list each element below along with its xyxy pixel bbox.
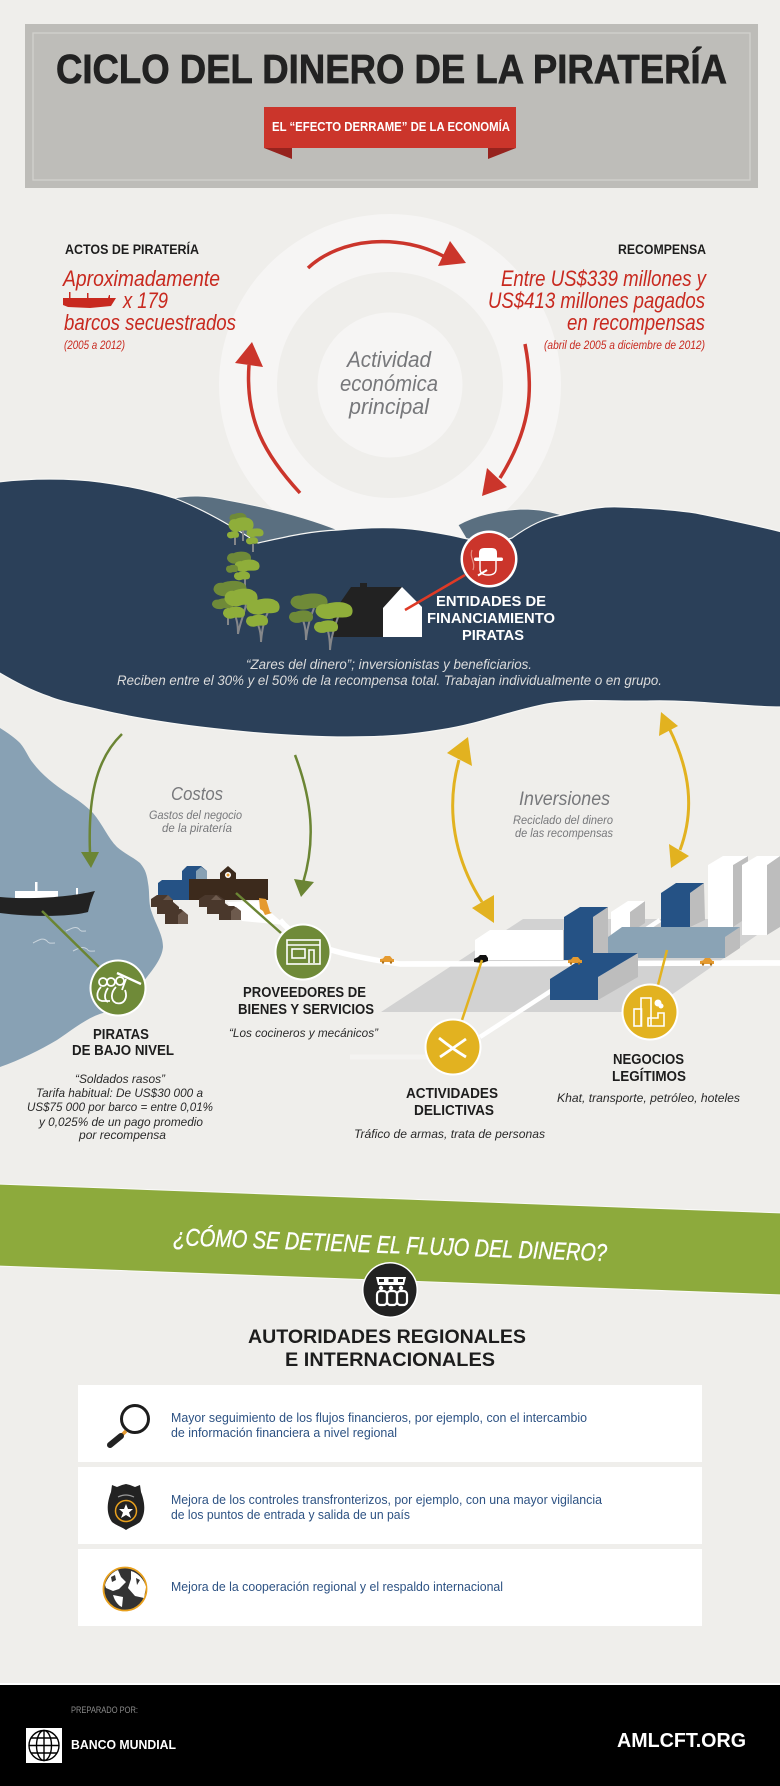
icon: globe [104, 1568, 146, 1610]
text: suppliers quote: “Los cocineros y mecánicos” [229, 1026, 379, 1040]
label: costs: de la piratería [162, 823, 232, 835]
text: financiers description: Reciben entre el 30% y el 50% de la recompensa total. Trabajan individualmente o en grupo. [117, 673, 662, 688]
text: low level pirates description: por recompensa [78, 1128, 166, 1142]
text: Banco Mundial: BANCO MUNDIAL [71, 1737, 176, 1752]
water [0, 728, 163, 1067]
connector: legit business line [658, 950, 667, 985]
banner: green stripe [0, 1184, 780, 1295]
logo: World Bank [26, 1728, 62, 1763]
icon: financier hat [460, 530, 518, 588]
text: low level pirates description: Tarifa habitual: De US$30 000 a [36, 1086, 203, 1100]
block: acts of piracy: ACTOS DE PIRATERÍA [65, 242, 199, 257]
block: acts of piracy: barcos secuestrados [64, 310, 236, 335]
heading: financiers [427, 594, 555, 644]
center label: Actividad [345, 347, 432, 372]
icon: house [333, 583, 422, 637]
label: investments: Inversiones [519, 789, 610, 810]
block: acts of piracy: Aproximadamente [61, 266, 220, 291]
back hills [174, 496, 562, 560]
center label: económica [340, 371, 438, 396]
footer [0, 1683, 780, 1786]
road over ground [400, 920, 780, 1037]
block: ransom: RECOMPENSA [618, 242, 706, 257]
heading: suppliers [238, 985, 374, 1018]
heading: low level pirates: DE BAJO NIVEL [72, 1043, 174, 1059]
arrow: green costs right [294, 755, 314, 897]
trees: house cluster [289, 593, 353, 650]
arrow: right red [482, 344, 529, 496]
heading: low level pirates [72, 1027, 174, 1059]
connector: suppliers line [236, 893, 281, 933]
arrow: yellow investment right [659, 712, 689, 868]
trees: top cluster [227, 513, 264, 552]
heading: financiers: FINANCIAMIENTO [427, 611, 555, 627]
text: cooperation: Mejora de la cooperación regional y el respaldo internacional [171, 1580, 503, 1594]
block: ransom: en recompensas [567, 310, 705, 335]
heading: legitimate business [612, 1052, 686, 1085]
icon: buildings [622, 984, 678, 1040]
heading: legitimate business: LEGÍTIMOS [612, 1068, 686, 1085]
concentric circles: main economic activity [219, 214, 561, 556]
text: website: AMLCFT.ORG [617, 1730, 746, 1752]
waves [33, 928, 95, 951]
heading: legitimate business: NEGOCIOS [613, 1052, 684, 1068]
panel: cooperation [78, 1549, 702, 1626]
trees: lower cluster [212, 581, 280, 642]
label: investments [513, 789, 614, 840]
arrow: left red [235, 342, 300, 493]
center label [340, 347, 438, 419]
label: investments: de las recompensas [515, 828, 613, 840]
icon: authorities [362, 1262, 418, 1318]
panel: title header [25, 24, 758, 188]
block: ransom: US$413 millones pagados [488, 288, 705, 313]
text: controls [171, 1493, 602, 1522]
text: legitimate business examples: Khat, transporte, petróleo, hoteles [557, 1091, 740, 1105]
port buildings [151, 866, 272, 924]
heading: criminal activities: ACTIVIDADES [406, 1086, 498, 1102]
icon: low level pirates [90, 960, 146, 1016]
city buildings [475, 856, 780, 1000]
icon: large ship [0, 882, 95, 916]
icon: suppliers store [274, 924, 332, 980]
block: acts of piracy: x 179 [122, 288, 168, 313]
text: tracking: de información financiera a nivel regional [171, 1426, 397, 1440]
text: low level pirates description: y 0,025% de un pago promedio [38, 1115, 203, 1129]
arrow: yellow investment left [447, 737, 494, 923]
heading: authorities: E INTERNACIONALES [285, 1350, 495, 1371]
panel: border controls [78, 1467, 702, 1544]
ribbon subtitle [264, 107, 516, 159]
block: acts of piracy [61, 242, 236, 352]
heading: low level pirates: PIRATAS [93, 1027, 149, 1043]
ribbon subtitle: EL “EFECTO DERRAME” DE LA ECONOMÍA [272, 119, 510, 134]
road [227, 901, 780, 1057]
label: costs: Gastos del negocio [149, 810, 243, 822]
cars [380, 955, 714, 966]
icon: magnifier [110, 1406, 148, 1445]
text: low level pirates description [27, 1072, 213, 1142]
block: acts of piracy: (2005 a 2012) [64, 340, 125, 352]
trees: middle cluster [226, 552, 260, 590]
block: ransom: (abril de 2005 a diciembre de 2012) [544, 340, 705, 352]
heading: financiers: ENTIDADES DE [436, 594, 546, 610]
heading: suppliers: PROVEEDORES DE [243, 985, 366, 1001]
heading: criminal activities: DELICTIVAS [414, 1103, 494, 1119]
heading: suppliers: BIENES Y SERVICIOS [238, 1002, 374, 1018]
connector: financiers line [405, 575, 465, 610]
text: low level pirates description: “Soldados rasos” [75, 1072, 166, 1086]
label: costs [149, 784, 243, 835]
text: controls: Mejora de los controles transfronterizos, por ejemplo, con una mayor vigilancia [171, 1493, 602, 1507]
icon: crossed rifles [424, 1018, 482, 1076]
heading: criminal activities [406, 1086, 498, 1119]
block: ransom [488, 242, 708, 352]
panel: financiers blue landscape [0, 479, 780, 737]
heading: how to stop: ¿CÓMO SE DETIENE EL FLUJO DEL DINERO? [173, 1224, 608, 1267]
connector: criminal activities line [462, 960, 482, 1020]
panel: financial tracking [78, 1385, 702, 1462]
connector: pirates line [42, 911, 100, 968]
text: prepared by: PREPARADO POR: [71, 1705, 138, 1715]
arrow: top red [308, 241, 466, 268]
text: financiers description: “Zares del dinero”; inversionistas y beneficiarios. [246, 657, 532, 672]
text: controls: de los puntos de entrada y salida de un país [171, 1508, 410, 1522]
text: tracking [171, 1411, 587, 1440]
ground [381, 919, 780, 1012]
icon: ship [63, 292, 116, 308]
label: costs: Costos [171, 784, 223, 804]
icon: badge [108, 1484, 144, 1530]
text: tracking: Mayor seguimiento de los flujos financieros, por ejemplo, con el intercambio [171, 1411, 587, 1425]
text: low level pirates description: US$75 000 por barco = entre 0,01% [27, 1100, 213, 1114]
heading: financiers: PIRATAS [462, 628, 524, 644]
text: financiers description [117, 657, 662, 688]
text: criminal activities examples: Tráfico de armas, trata de personas [354, 1127, 545, 1141]
heading: authorities [248, 1327, 526, 1371]
label: investments: Reciclado del dinero [513, 815, 614, 827]
arrow: green costs left [81, 734, 122, 868]
block: ransom: Entre US$339 millones y [501, 266, 708, 291]
heading: authorities: AUTORIDADES REGIONALES [248, 1327, 526, 1348]
center label: principal [348, 394, 430, 419]
